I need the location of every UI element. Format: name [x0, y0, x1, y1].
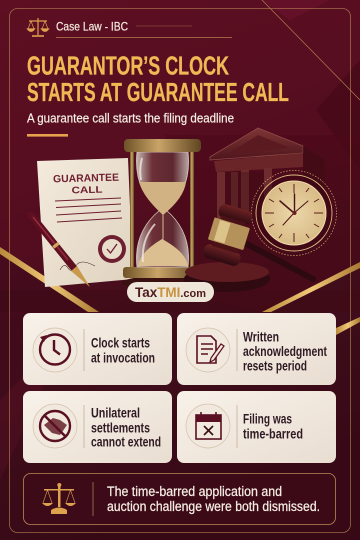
panel: filing was time-barred: [177, 391, 336, 463]
illustration: wall clock: [252, 170, 336, 256]
gold diagonal ribbons: [0, 247, 360, 335]
logo pill: [127, 282, 214, 302]
icon: document and pen: [186, 328, 230, 372]
icon: no handshake: [33, 404, 77, 448]
illustration: guarantee call document: GUARANTEE: [53, 172, 119, 185]
illustration: courthouse: [210, 128, 325, 224]
icon: small scales: [28, 18, 48, 36]
icon: calendar with cross: [186, 404, 230, 448]
title: [27, 50, 289, 107]
panel: filing was time-barred: time-barred: [243, 426, 303, 442]
header: case law label: Case Law - IBC: [56, 20, 128, 34]
illustration: guarantee call document: CALL: [71, 185, 103, 196]
panel: written acknowledgment: [177, 313, 336, 385]
panel: unilateral settlements: Unilateral: [91, 406, 140, 420]
illustration: guarantee call document: [37, 158, 133, 287]
panel: clock starts at invocation: Clock starts: [91, 336, 150, 350]
panel: unilateral settlements: [23, 391, 172, 463]
panel: clock starts at invocation: [23, 313, 172, 385]
icon: clock: [33, 328, 77, 372]
illustration: hourglass: [122, 139, 202, 290]
illustration: gavel: [184, 202, 313, 292]
subtitle: A guarantee call starts the filing deadline: [27, 110, 234, 126]
callout: dismissal outcome: The time-barred application and: [107, 484, 282, 499]
panel: written acknowledgment: Written: [243, 330, 279, 344]
panel: clock starts at invocation: at invocation: [91, 350, 155, 366]
callout: dismissal outcome: [24, 474, 336, 524]
icon: fountain pen: [31, 215, 90, 287]
stamp seal: [98, 235, 126, 263]
panel: unilateral settlements: cannot extend: [91, 434, 161, 450]
panel: unilateral settlements: settlements: [91, 420, 150, 436]
panel: filing was time-barred: Filing was: [243, 412, 292, 426]
icon: scales of justice: [42, 483, 76, 514]
header: case law label: [28, 18, 232, 38]
accent bar: [27, 134, 68, 137]
logo pill: TaxTMI.com: [135, 285, 206, 300]
panel: written acknowledgment: acknowledgment: [243, 344, 327, 359]
panel: written acknowledgment: resets period: [243, 358, 307, 374]
callout: dismissal outcome: auction challenge were both dismissed.: [107, 499, 320, 514]
title: GUARANTOR’S CLOCK: [27, 50, 229, 80]
